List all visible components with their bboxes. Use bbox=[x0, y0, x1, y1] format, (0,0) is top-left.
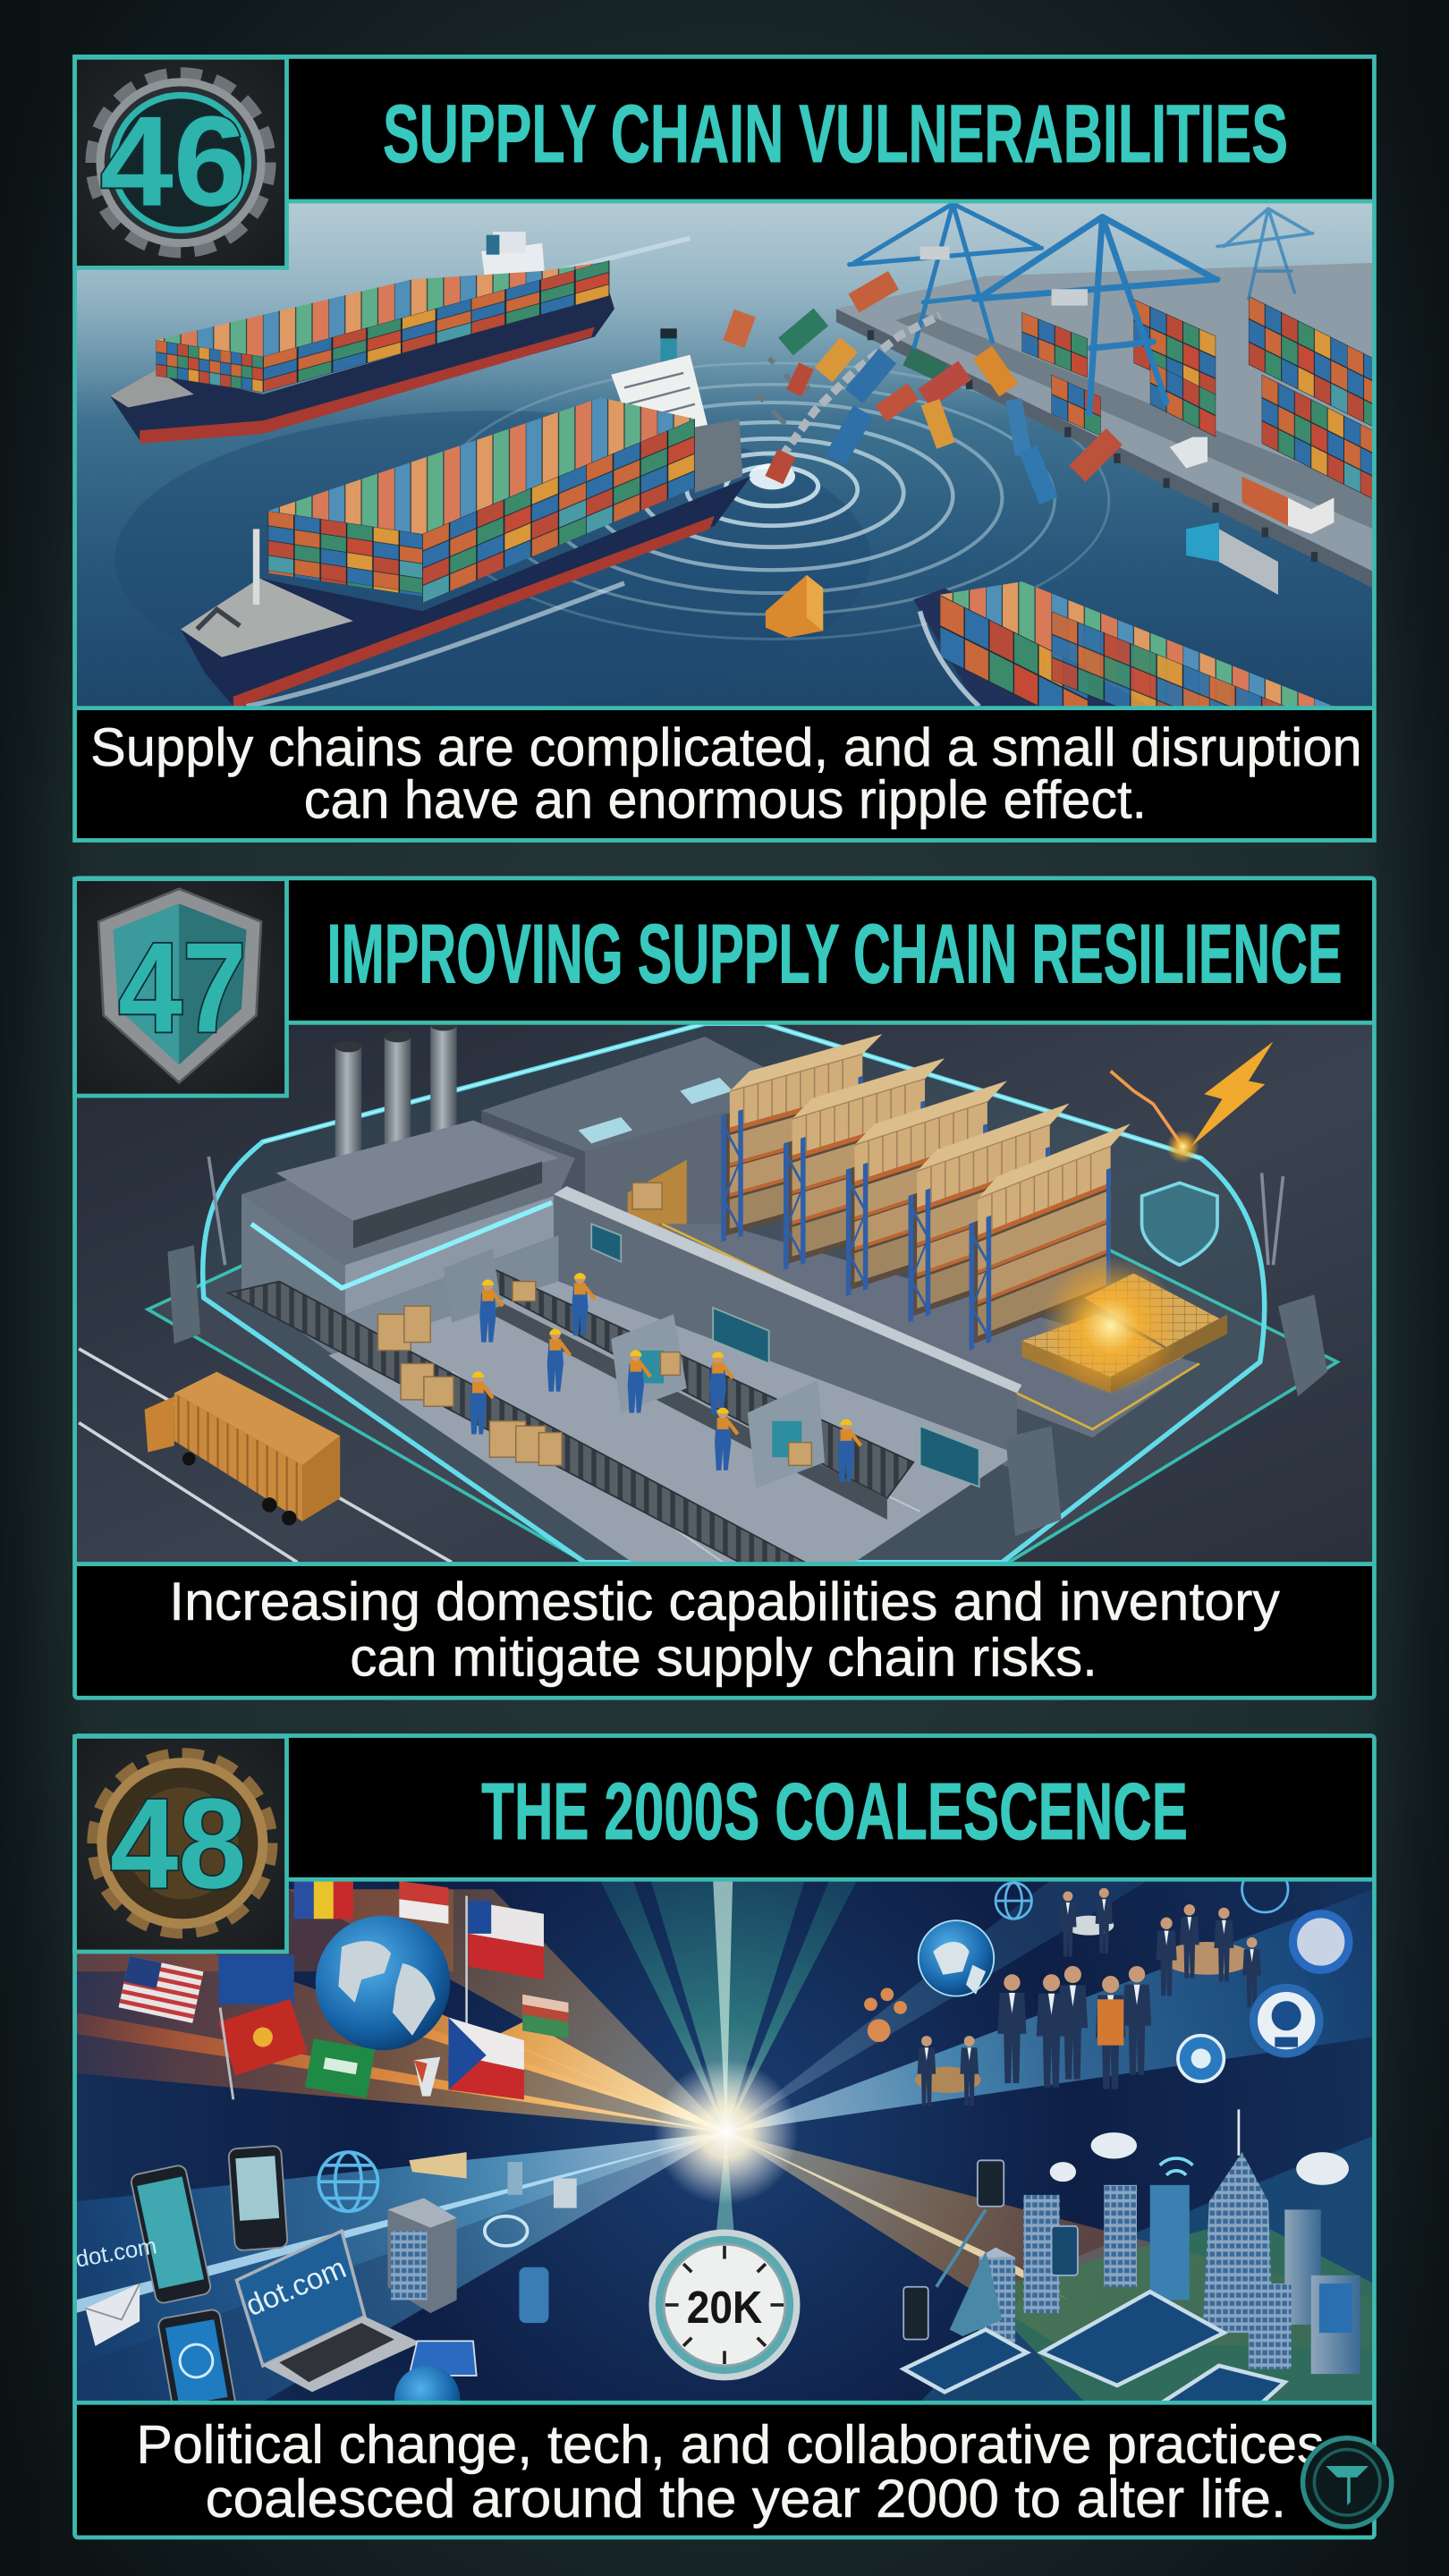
caption text bbox=[90, 716, 1362, 830]
smart city bbox=[903, 2109, 1374, 2415]
devices: phones and laptop: dot.com bbox=[242, 2251, 351, 2323]
devices: phones and laptop: dot.com bbox=[74, 2233, 158, 2273]
caption bar bbox=[75, 708, 1374, 840]
illustration: cargo ships and broken chain bbox=[77, 203, 1372, 707]
outer conveyor bbox=[228, 1282, 805, 1563]
panel frame bbox=[75, 878, 1374, 1698]
road with white lane lines bbox=[79, 1349, 452, 1563]
illustration: converging light rays bbox=[74, 1867, 1374, 2431]
caption text bbox=[169, 1571, 1281, 1687]
logo: circular watermark bbox=[1303, 2438, 1392, 2527]
panel: 47 improving resilience bbox=[75, 878, 1374, 1698]
ship: front container ship bbox=[181, 328, 750, 709]
badge: gear 46: 46 bbox=[100, 90, 247, 233]
header bar bbox=[286, 59, 1374, 200]
security posts bbox=[167, 1245, 1327, 1536]
port quay and container yard bbox=[836, 263, 1380, 589]
panel frame bbox=[75, 56, 1374, 840]
clock: 20K bbox=[652, 2233, 797, 2377]
light rays bbox=[75, 1879, 1374, 2402]
badge: bronze gear 48: 48 bbox=[110, 1772, 247, 1915]
truck bbox=[145, 1372, 340, 1525]
protective dome bbox=[203, 1023, 1265, 1563]
factory building with chimneys bbox=[242, 1020, 575, 1363]
panel: 46 supply chain vulnerabilities bbox=[75, 56, 1380, 840]
warehouse building bbox=[481, 1037, 764, 1240]
badge: gear 46 bbox=[75, 57, 287, 267]
icon: shield bbox=[1142, 1182, 1217, 1265]
badge: bronze gear 48 bbox=[75, 1736, 287, 1952]
header bar bbox=[286, 880, 1374, 1021]
globe: left bbox=[316, 1916, 450, 2050]
ship: rear container ship bbox=[110, 232, 690, 444]
caption text: can have an enormous ripple effect. bbox=[304, 769, 1147, 830]
caption text bbox=[136, 2413, 1324, 2529]
gantry cranes bbox=[850, 204, 1313, 414]
globes: upper right bbox=[919, 1867, 1288, 1996]
people collaborating bbox=[915, 1888, 1261, 2106]
falling containers and broken chain bbox=[723, 271, 1123, 638]
inventory floor bbox=[657, 1224, 1199, 1437]
flags bbox=[119, 1877, 569, 2099]
caption bar bbox=[75, 2403, 1374, 2537]
panel frame bbox=[75, 1736, 1374, 2538]
cardboard boxes bbox=[377, 1182, 811, 1465]
clock: 20K: 20K bbox=[687, 2281, 762, 2333]
icons: web, server and data bbox=[318, 2152, 577, 2323]
icons: collaboration bbox=[864, 1914, 1349, 2081]
icon: lightning bolt bbox=[1111, 1041, 1273, 1163]
badge: shield 47: 47 bbox=[118, 916, 247, 1059]
illustration: shielded factory and warehouse bbox=[75, 1020, 1374, 1564]
production floor bbox=[328, 1282, 1017, 1563]
caption text: Supply chains are complicated, and a small disruption bbox=[90, 716, 1362, 777]
caption text: can mitigate supply chain risks. bbox=[350, 1626, 1097, 1687]
floor platform bbox=[145, 1131, 1341, 1562]
caption text: Increasing domestic capabilities and inventory bbox=[169, 1571, 1281, 1631]
badge: shield 47 bbox=[75, 879, 287, 1096]
screens on wall bbox=[591, 1224, 979, 1487]
ship: foreground container ship bbox=[913, 581, 1333, 707]
caption text: Political change, tech, and collaborative practices bbox=[136, 2413, 1324, 2474]
burst pallets bbox=[1021, 1257, 1227, 1394]
caption bar bbox=[75, 1564, 1374, 1697]
caption text: coalesced around the year 2000 to alter life. bbox=[206, 2468, 1286, 2529]
header bar bbox=[286, 1738, 1374, 1877]
trucks bbox=[1170, 437, 1334, 595]
inventory racks bbox=[721, 1034, 1131, 1351]
factory workers bbox=[470, 1273, 860, 1482]
panel: 48 the 2000s coalescence bbox=[74, 1736, 1374, 2538]
pylons bbox=[208, 1157, 1283, 1265]
partition wall bbox=[554, 1194, 1017, 1470]
devices: phones and laptop bbox=[74, 2146, 477, 2431]
inner conveyor and machines bbox=[444, 1249, 913, 1520]
